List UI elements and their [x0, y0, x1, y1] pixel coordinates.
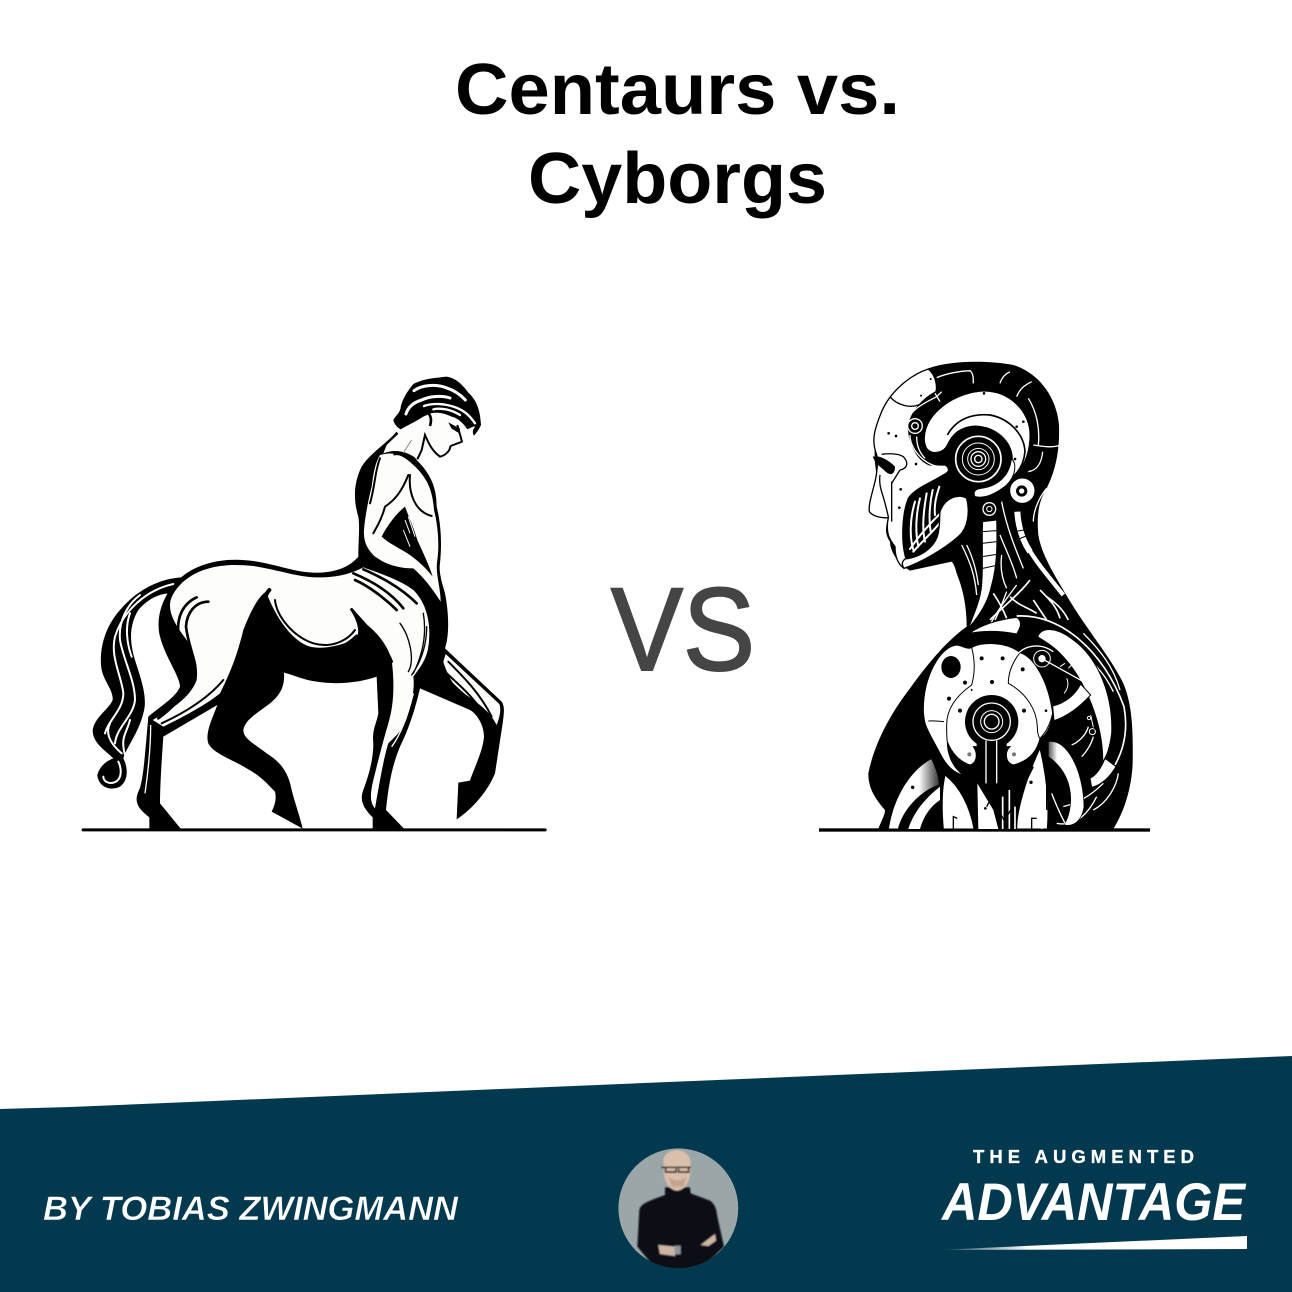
cyborg right strip	[1017, 748, 1048, 829]
centaur ear	[426, 412, 431, 426]
cyborg tusk tail	[1042, 793, 1065, 829]
centaur chest lines	[370, 453, 433, 533]
cyborg flank lines	[1057, 727, 1118, 824]
logo: the augmented advantage: ADVANTAGE	[940, 1173, 1247, 1232]
cyborg lower rivets	[905, 781, 1033, 821]
cyborg body details	[888, 580, 1126, 829]
logo: the augmented advantage: THE AUGMENTED	[973, 1146, 1194, 1167]
cyborg chest core	[965, 695, 1018, 829]
byline: BY TOBIAS ZWINGMANN	[43, 1190, 459, 1228]
VS label: VS	[611, 564, 755, 696]
centaur arm shadow	[382, 507, 433, 577]
cyborg left arm strip	[908, 787, 940, 829]
logo: the augmented advantage	[937, 1146, 1247, 1250]
title: Centaurs vs.	[455, 50, 900, 130]
cyborg neck base cables	[990, 580, 1068, 620]
cyborg back crescent	[1038, 630, 1112, 762]
cyborg centre left strip	[942, 775, 974, 829]
footer banner	[0, 1056, 1292, 1292]
cyborg shoulder plate and chest shield	[923, 644, 1053, 775]
centaur body silhouette	[137, 432, 504, 829]
cyborg mouth cavity	[906, 478, 949, 552]
centaur raised leg highlight	[443, 654, 500, 725]
cyborg shoulder socket	[1010, 646, 1082, 693]
cyborg tusk plate	[1048, 741, 1084, 825]
centaur hair mass	[393, 377, 481, 436]
cyborg small hook	[1087, 715, 1095, 735]
cyborg crossing wires	[975, 767, 1047, 829]
centaur neck	[383, 416, 425, 459]
cyborg jaw wires	[910, 487, 947, 552]
cyborg jaw plate	[902, 496, 968, 568]
cyborg rivets	[947, 656, 1047, 713]
cyborg silhouette	[868, 362, 1133, 829]
centaur abdomen hatching	[403, 517, 415, 547]
centaur eye	[448, 422, 460, 433]
centaur hair strands	[406, 385, 465, 414]
cyborg ground line	[819, 828, 1150, 832]
cyborg swirl rivets	[983, 392, 1025, 460]
cyborg upper arm band	[1053, 684, 1091, 721]
centaur clavicle	[393, 454, 430, 482]
cyborg neck wires	[962, 502, 1023, 625]
centaur ground line	[82, 828, 547, 831]
cyborg collar plate	[969, 617, 1021, 634]
centaur tail	[93, 577, 182, 789]
cyborg face plate	[869, 369, 949, 568]
cyborg face rivets	[887, 378, 932, 509]
centaur head	[383, 377, 481, 482]
cyborg left arm plate	[888, 758, 939, 829]
illustration: cyborg	[819, 362, 1150, 832]
cyborg head circuit lines	[909, 371, 1059, 522]
illustration: centaur	[82, 377, 547, 831]
cyborg plate seams	[928, 647, 1053, 742]
cyborg temple and ear joints	[908, 419, 1035, 515]
cyborg neck spine	[968, 520, 997, 628]
cyborg grey rivets	[967, 752, 971, 756]
centaur neck crease	[403, 440, 412, 453]
cyborg centre strip	[977, 783, 998, 829]
centaur horse body highlight	[153, 565, 429, 808]
cyborg lower back band	[1090, 758, 1116, 787]
cyborg back band outer	[1017, 616, 1126, 765]
centaur face	[425, 413, 462, 457]
cyborg head details	[869, 369, 1063, 628]
centaur shading strokes	[158, 569, 492, 730]
centaur torso highlight	[364, 453, 441, 602]
cyborg neck tube	[1017, 512, 1030, 552]
cyborg skull seam	[880, 392, 936, 522]
title: Cyborgs	[528, 139, 827, 219]
author photo	[618, 1148, 738, 1270]
cyborg swirl	[924, 391, 1030, 498]
title	[455, 50, 900, 219]
cyborg shoulder hole	[941, 656, 961, 678]
cyborg eye	[873, 456, 895, 474]
cyborg centre stripes	[1003, 790, 1015, 829]
centaur face outline	[417, 425, 462, 459]
centaur rear leg highlight	[145, 693, 413, 793]
